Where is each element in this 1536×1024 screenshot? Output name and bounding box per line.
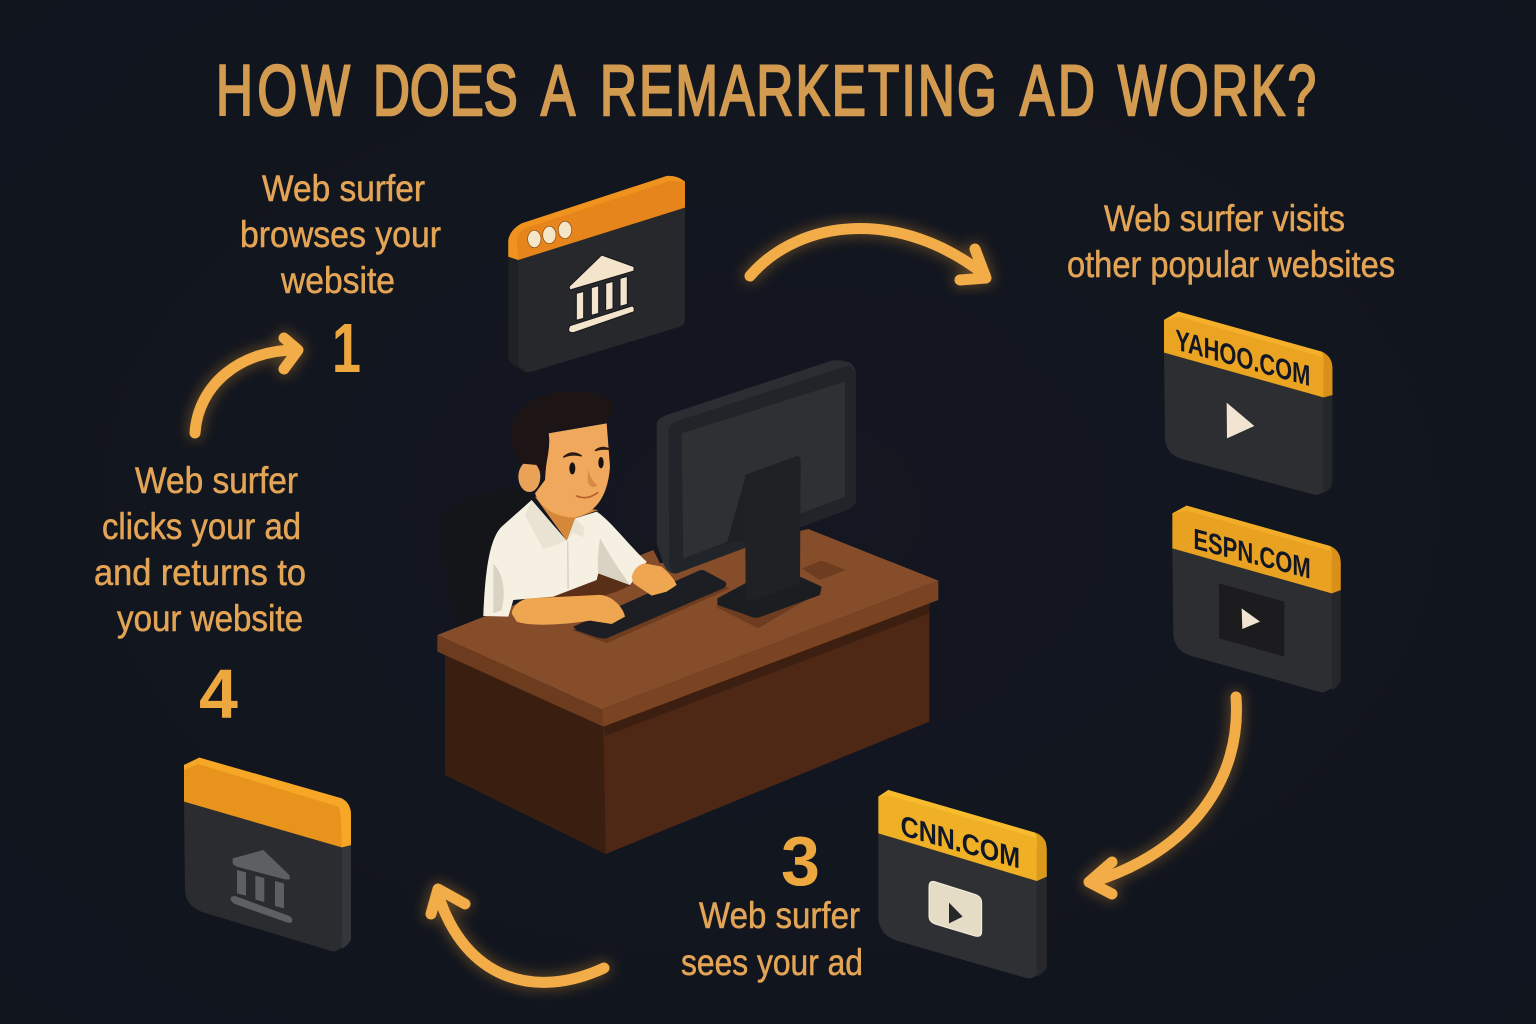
step number 4: 4 xyxy=(199,655,238,733)
title: REMARKETING xyxy=(600,52,997,131)
icon: CNN.COM window with ad: CNN.COM xyxy=(901,809,1020,875)
icon: YAHOO.COM window xyxy=(1164,312,1332,495)
icon: your website window xyxy=(508,176,685,372)
step 4 caption: clicks your ad xyxy=(102,506,301,547)
title: A xyxy=(541,52,576,131)
facial features xyxy=(563,447,610,498)
icon: ESPN.COM window xyxy=(1172,506,1341,692)
arrow: other sites to CNN ad xyxy=(1089,697,1236,894)
step 4 caption: Web surfer xyxy=(135,460,298,501)
icon: returning to website window xyxy=(184,758,351,951)
step 4 caption: and returns to xyxy=(94,552,306,593)
step 4 caption: your website xyxy=(117,598,303,639)
step number 3: 3 xyxy=(781,822,820,900)
step number 1: 1 xyxy=(332,309,361,387)
step 3 caption: Web surfer xyxy=(699,895,860,936)
step 2 caption: other popular websites xyxy=(1067,244,1395,285)
icon: YAHOO.COM window: YAHOO.COM xyxy=(1175,324,1310,393)
step 1 caption: Web surfer xyxy=(262,168,425,209)
title: HOW xyxy=(216,52,350,131)
step 2 caption xyxy=(1067,198,1395,285)
title: WORK? xyxy=(1118,52,1316,131)
step 3 caption: sees your ad xyxy=(681,942,863,983)
face xyxy=(535,423,610,518)
step 1 caption: browses your xyxy=(240,214,441,255)
shirt xyxy=(483,500,647,617)
title xyxy=(216,52,1316,131)
desk xyxy=(437,529,938,854)
arrow: ad back to website xyxy=(431,889,604,982)
chair xyxy=(440,485,533,627)
right arm xyxy=(512,595,625,625)
step 3 caption xyxy=(681,895,863,983)
arrow: website to other sites xyxy=(750,229,986,280)
neck xyxy=(535,497,598,541)
shirt shading xyxy=(493,538,630,613)
hair xyxy=(511,392,615,479)
collar xyxy=(525,501,584,549)
keyboard xyxy=(573,570,726,639)
arrow: step 4 to step 1 xyxy=(195,338,298,433)
step 4 caption xyxy=(94,460,306,639)
icon: ESPN.COM window: ESPN.COM xyxy=(1193,523,1311,586)
step 2 caption: Web surfer visits xyxy=(1104,198,1345,239)
ear xyxy=(518,461,540,492)
title: AD xyxy=(1020,52,1095,131)
title: DOES xyxy=(373,52,518,131)
icon: CNN.COM window with ad xyxy=(878,790,1047,978)
left hand xyxy=(632,563,677,596)
monitor xyxy=(657,360,856,618)
step 1 caption xyxy=(240,168,441,301)
illustration: person at desk xyxy=(437,360,938,854)
step 1 caption: website xyxy=(280,260,395,301)
